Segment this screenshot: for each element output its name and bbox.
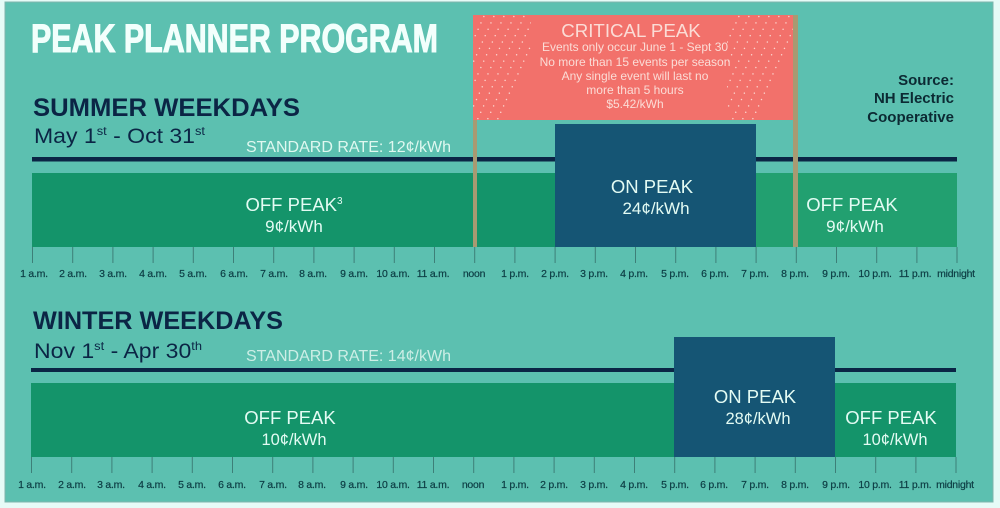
critical peak text: No more than 15 events per season	[540, 55, 730, 69]
summer dates: May 1	[34, 124, 93, 148]
summer heading: SUMMER WEEKDAYS	[33, 94, 300, 122]
summer dates: - Oct 31	[107, 124, 195, 148]
critical peak box	[473, 15, 793, 120]
winter time axis: noon	[462, 479, 485, 491]
panel: winter weekdays	[18, 307, 974, 491]
panel: critical peak	[473, 15, 798, 247]
summer time axis: midnight	[937, 268, 975, 280]
winter heading: WINTER WEEKDAYS	[33, 307, 283, 335]
summer standard rate line	[32, 157, 957, 162]
winter time axis: 11 p.m.	[899, 479, 931, 491]
summer time axis: 8 p.m.	[781, 268, 809, 280]
winter time axis: 8 a.m.	[298, 479, 326, 491]
winter dates: Nov 1	[34, 339, 90, 363]
summer evening off peak label: 9¢/kWh	[826, 217, 884, 236]
winter time axis: midnight	[936, 479, 974, 491]
critical peak text: Any single event will last no	[562, 69, 709, 83]
winter time axis: 9 a.m.	[340, 479, 368, 491]
title: PEAK PLANNER PROGRAM	[31, 17, 438, 61]
winter time axis	[18, 457, 974, 491]
winter time axis: 3 a.m.	[97, 479, 125, 491]
summer off peak label	[245, 194, 343, 236]
critical peak text: CRITICAL PEAK	[561, 20, 701, 41]
panel: summer weekdays	[20, 94, 975, 280]
winter time axis: 9 p.m.	[822, 479, 850, 491]
summer time axis: 2 a.m.	[59, 268, 87, 280]
summer time axis: 6 a.m.	[220, 268, 248, 280]
summer time axis: 10 a.m.	[376, 268, 410, 280]
summer time axis: 11 a.m.	[417, 268, 449, 280]
winter off peak bar	[31, 383, 956, 457]
summer off peak label: 3	[337, 196, 343, 207]
summer off peak label: OFF PEAK	[245, 194, 337, 215]
winter dates: - Apr 30	[104, 339, 191, 363]
winter off peak label	[244, 407, 336, 449]
summer standard rate label: STANDARD RATE: 12¢/kWh	[246, 139, 451, 156]
critical peak text: more than 5 hours	[586, 83, 684, 97]
summer time axis: noon	[463, 268, 486, 280]
summer time axis: 5 a.m.	[179, 268, 207, 280]
winter time axis: 4 a.m.	[138, 479, 166, 491]
winter on peak label: ON PEAK	[714, 386, 797, 407]
summer time axis: 10 p.m.	[858, 268, 892, 280]
winter standard rate line	[31, 368, 956, 372]
summer time axis	[20, 247, 975, 280]
source note: NH Electric	[874, 90, 954, 107]
winter time axis: 2 a.m.	[58, 479, 86, 491]
source note: Source:	[898, 72, 954, 89]
summer time axis: 2 p.m.	[541, 268, 569, 280]
winter time axis: 7 a.m.	[259, 479, 287, 491]
winter on peak label	[714, 386, 797, 428]
winter off peak label: OFF PEAK	[244, 407, 336, 428]
winter time axis: 10 a.m.	[376, 479, 410, 491]
summer time axis: 4 p.m.	[620, 268, 648, 280]
summer time axis: 1 p.m.	[501, 268, 529, 280]
summer off peak evening bar	[756, 173, 957, 247]
summer off peak morning bar	[32, 173, 555, 247]
summer time axis: 5 p.m.	[661, 268, 689, 280]
winter time axis: 11 a.m.	[417, 479, 449, 491]
critical peak text: $5.42/kWh	[606, 97, 664, 111]
summer evening off peak label: OFF PEAK	[806, 194, 898, 215]
winter time axis: 4 p.m.	[620, 479, 648, 491]
source note	[867, 72, 954, 126]
winter time axis: 1 p.m.	[501, 479, 529, 491]
summer on peak label	[611, 176, 694, 218]
summer time axis: 8 a.m.	[299, 268, 327, 280]
winter evening off peak label: 10¢/kWh	[862, 431, 928, 449]
summer time axis: 6 p.m.	[701, 268, 729, 280]
summer time axis: 7 p.m.	[741, 268, 769, 280]
winter time axis: 3 p.m.	[580, 479, 608, 491]
winter time axis: 1 a.m.	[18, 479, 46, 491]
summer time axis: 1 a.m.	[20, 268, 48, 280]
winter off peak label: 10¢/kWh	[261, 431, 327, 449]
summer on peak label: 24¢/kWh	[622, 199, 690, 218]
summer time axis: 11 p.m.	[899, 268, 931, 280]
winter evening off peak label	[845, 407, 937, 449]
summer off peak label: 9¢/kWh	[265, 217, 323, 236]
summer time axis: 9 p.m.	[822, 268, 850, 280]
winter evening off peak label: OFF PEAK	[845, 407, 937, 428]
winter dates: th	[191, 339, 202, 353]
critical peak dot pattern left	[473, 16, 531, 120]
summer on peak block	[555, 124, 756, 247]
winter standard rate label: STANDARD RATE: 14¢/kWh	[246, 348, 451, 365]
winter on peak block	[674, 337, 835, 457]
winter time axis: 5 p.m.	[661, 479, 689, 491]
summer evening off peak label	[806, 194, 898, 236]
winter time axis: 10 p.m.	[858, 479, 892, 491]
critical peak text	[540, 20, 730, 111]
summer dates: st	[97, 124, 107, 138]
summer time axis: 3 p.m.	[580, 268, 608, 280]
critical peak posts	[473, 15, 798, 247]
winter time axis: 6 p.m.	[700, 479, 728, 491]
summer time axis: 9 a.m.	[340, 268, 368, 280]
winter on peak label: 28¢/kWh	[725, 410, 791, 428]
summer time axis: 3 a.m.	[99, 268, 127, 280]
critical peak dot pattern right	[727, 16, 793, 120]
source note: Cooperative	[867, 109, 954, 126]
winter time axis: 8 p.m.	[781, 479, 809, 491]
summer on peak label: ON PEAK	[611, 176, 694, 197]
winter time axis: 2 p.m.	[540, 479, 568, 491]
critical peak text: Events only occur June 1 - Sept 30	[542, 40, 728, 54]
summer dates: st	[195, 124, 206, 138]
winter time axis: 7 p.m.	[741, 479, 769, 491]
summer time axis: 7 a.m.	[260, 268, 288, 280]
winter time axis: 5 a.m.	[178, 479, 206, 491]
summer time axis: 4 a.m.	[139, 268, 167, 280]
winter time axis: 6 a.m.	[218, 479, 246, 491]
winter dates: st	[94, 339, 105, 353]
